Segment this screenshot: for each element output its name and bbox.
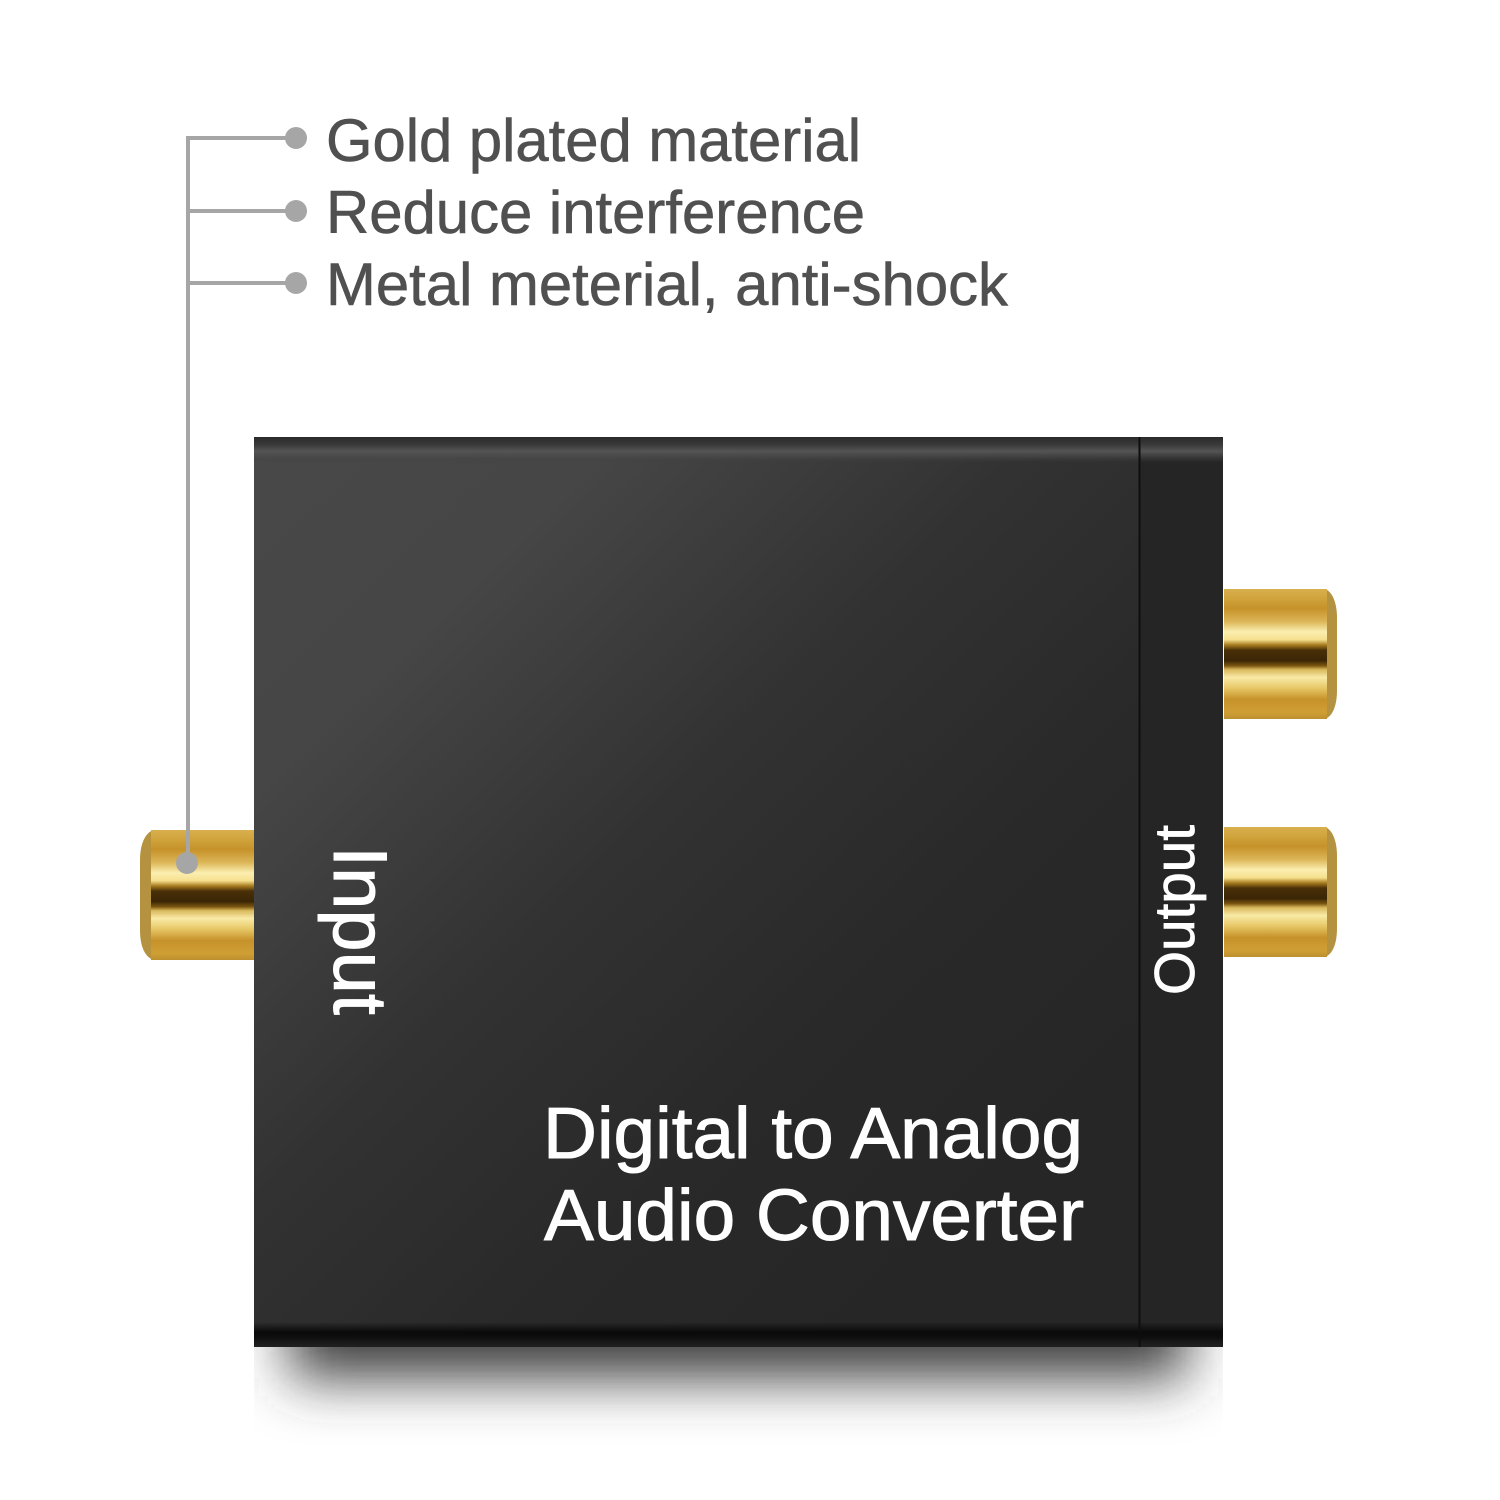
leader branch 2	[186, 209, 294, 213]
device bottom edge	[254, 1322, 1223, 1347]
dot 2	[285, 200, 307, 222]
device end cap	[1140, 437, 1223, 1347]
feature list	[326, 107, 1009, 318]
dot 3	[285, 272, 307, 294]
feature: reduce interference: Reduce interference	[326, 179, 865, 246]
dot on connector	[176, 852, 198, 874]
output label: Output	[1143, 825, 1207, 995]
product name line 2: Audio Converter	[544, 1176, 1084, 1256]
converter device	[254, 437, 1223, 1347]
dot 1	[285, 127, 307, 149]
product name line 1: Digital to Analog	[543, 1094, 1083, 1174]
device top edge	[254, 437, 1223, 463]
leader branch 1	[186, 136, 294, 140]
input connector	[140, 830, 254, 960]
device front panel	[254, 437, 1140, 1347]
device seam	[1138, 437, 1140, 1347]
feature: gold plated: Gold plated material	[326, 107, 861, 174]
input label: Input	[317, 846, 402, 1015]
feature: metal material: Metal meterial, anti-shock	[326, 251, 1009, 318]
device shadow	[254, 1347, 1223, 1426]
leader branch 3	[186, 281, 294, 285]
leader trunk	[186, 136, 190, 864]
output connector bottom	[1224, 827, 1337, 957]
callout leader lines	[176, 127, 307, 874]
output connector top	[1224, 589, 1337, 719]
